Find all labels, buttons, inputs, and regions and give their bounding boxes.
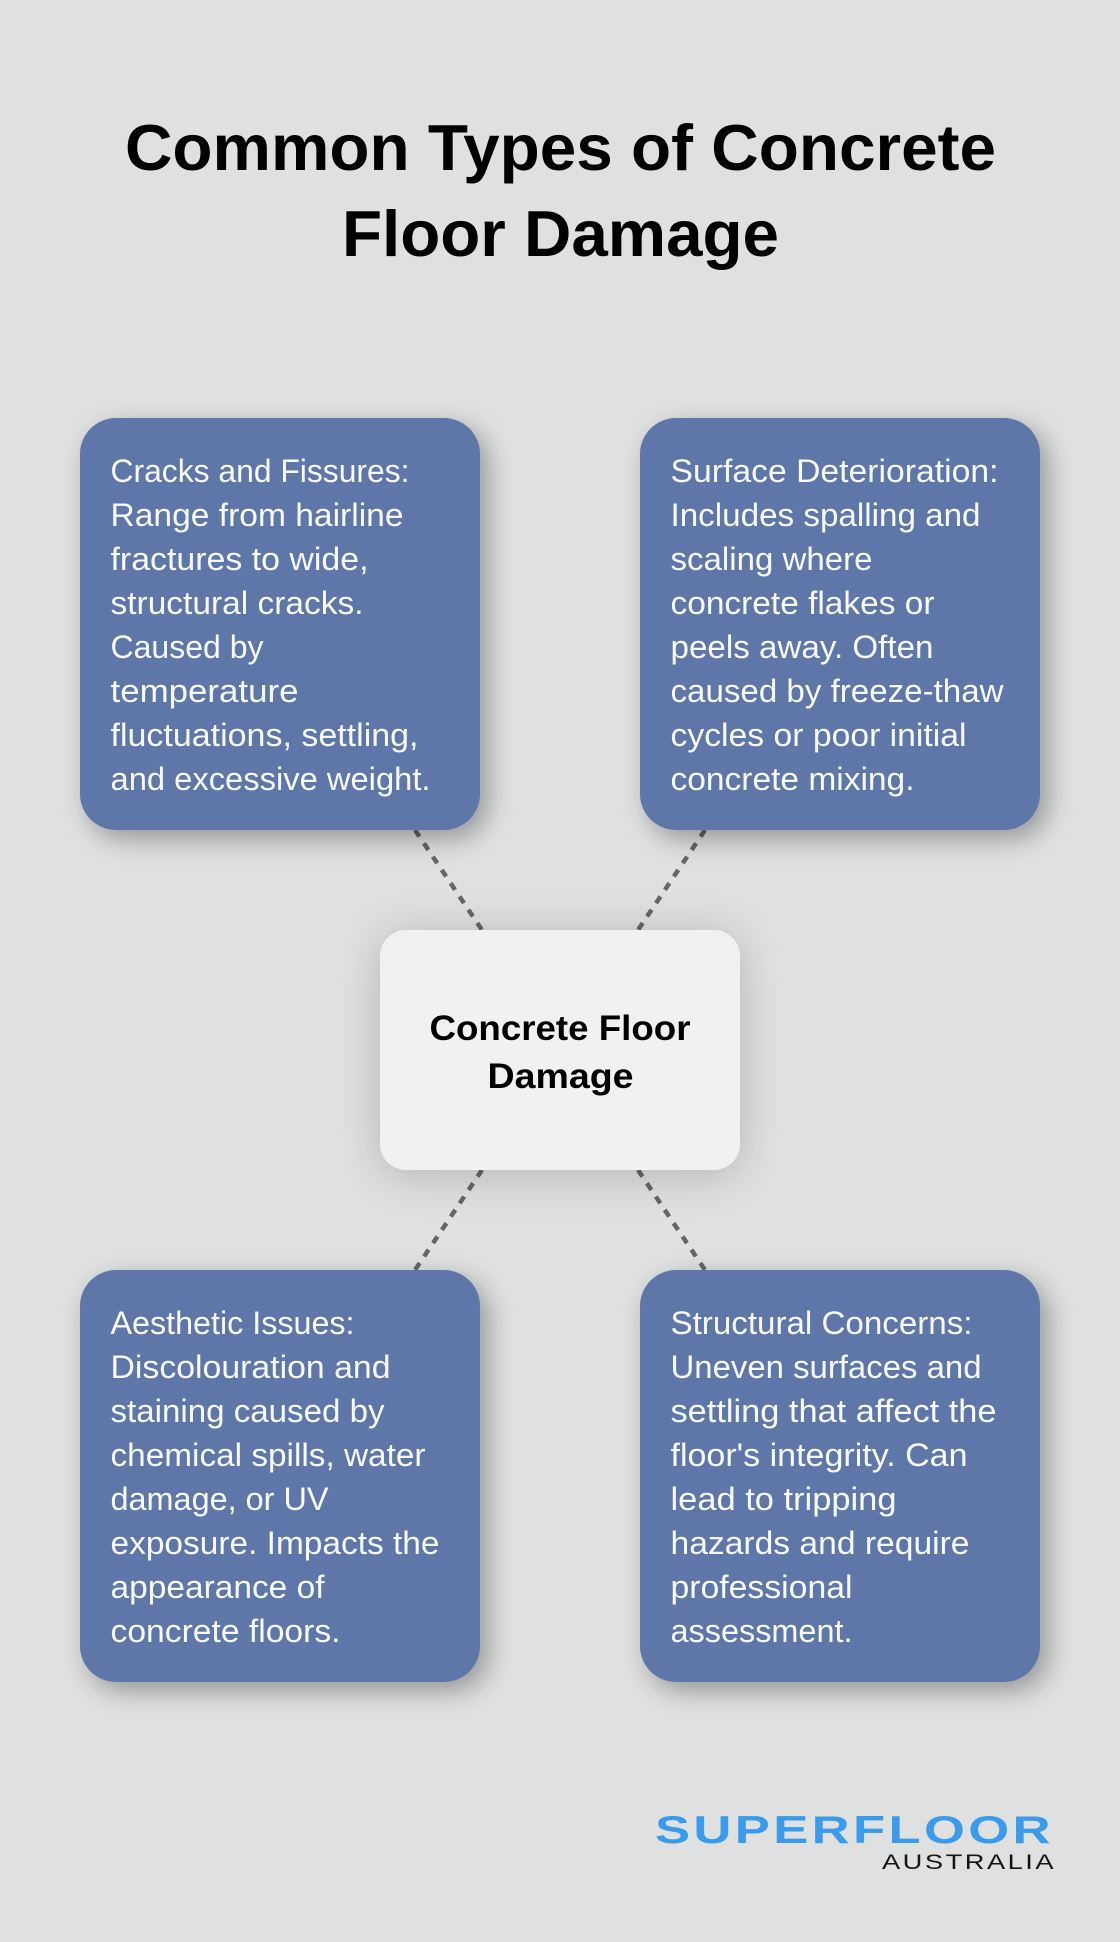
logo: Superfloor Australia: SUPERFLOOR <box>655 1808 1051 1851</box>
panel: cracks and fissures: and excessive weight. <box>110 761 430 797</box>
panel: aesthetic issues: exposure. Impacts the <box>110 1525 440 1561</box>
panel: cracks and fissures: fractures to wide, <box>110 541 368 577</box>
panel: surface deterioration: scaling where <box>670 541 872 577</box>
panel: aesthetic issues: damage, or UV <box>110 1481 329 1517</box>
panel: structural concerns: lead to tripping <box>670 1481 896 1517</box>
panel: cracks and fissures: Cracks and Fissures: <box>110 453 410 489</box>
panel: aesthetic issues <box>80 1270 480 1682</box>
panel: surface deterioration: concrete mixing. <box>670 761 914 797</box>
panel: cracks and fissures: Range from hairline <box>110 497 404 533</box>
panel: cracks and fissures: fluctuations, settling, <box>110 717 418 753</box>
panel: surface deterioration: peels away. Often <box>670 629 934 665</box>
panel: structural concerns: Structural Concerns: <box>670 1305 972 1341</box>
panel: cracks and fissures: structural cracks. <box>110 585 364 621</box>
panel: aesthetic issues: Aesthetic Issues: <box>110 1305 354 1341</box>
panel: structural concerns <box>640 1270 1040 1682</box>
panel: structural concerns: Uneven surfaces and <box>670 1349 982 1385</box>
panel: cracks and fissures: temperature <box>110 673 298 709</box>
panel: aesthetic issues: appearance of <box>110 1569 325 1605</box>
panel: surface deterioration: concrete flakes or <box>670 585 935 621</box>
panel: surface deterioration <box>640 418 1040 830</box>
panel: aesthetic issues: staining caused by <box>110 1393 384 1429</box>
panel: structural concerns: hazards and require <box>670 1525 970 1561</box>
title: Floor Damage <box>342 197 779 270</box>
panel: surface deterioration: caused by freeze-thaw <box>670 673 1004 709</box>
logo: Superfloor Australia: AUSTRALIA <box>882 1851 1054 1874</box>
panel: structural concerns: floor's integrity. Can <box>670 1437 968 1473</box>
panel: cracks and fissures: Caused by <box>110 629 264 665</box>
panel: surface deterioration: Includes spalling and <box>670 497 980 533</box>
panel: aesthetic issues: concrete floors. <box>110 1613 340 1649</box>
panel: center node: Concrete Floor <box>430 1009 691 1048</box>
panel: structural concerns: assessment. <box>670 1613 852 1649</box>
panel: cracks and fissures <box>80 418 480 830</box>
panel: aesthetic issues: Discolouration and <box>110 1349 390 1385</box>
title <box>125 111 996 270</box>
panel: structural concerns: professional <box>670 1569 852 1605</box>
panel: surface deterioration: cycles or poor initial <box>670 717 966 753</box>
panel: structural concerns: settling that affect the <box>670 1393 996 1429</box>
panel: center node: Damage <box>488 1057 634 1096</box>
panel: aesthetic issues: chemical spills, water <box>110 1437 426 1473</box>
title: Common Types of Concrete <box>125 111 996 184</box>
panel: center node <box>380 930 740 1170</box>
panel: surface deterioration: Surface Deterioration: <box>670 453 998 489</box>
logo: Superfloor Australia <box>655 1808 1054 1874</box>
